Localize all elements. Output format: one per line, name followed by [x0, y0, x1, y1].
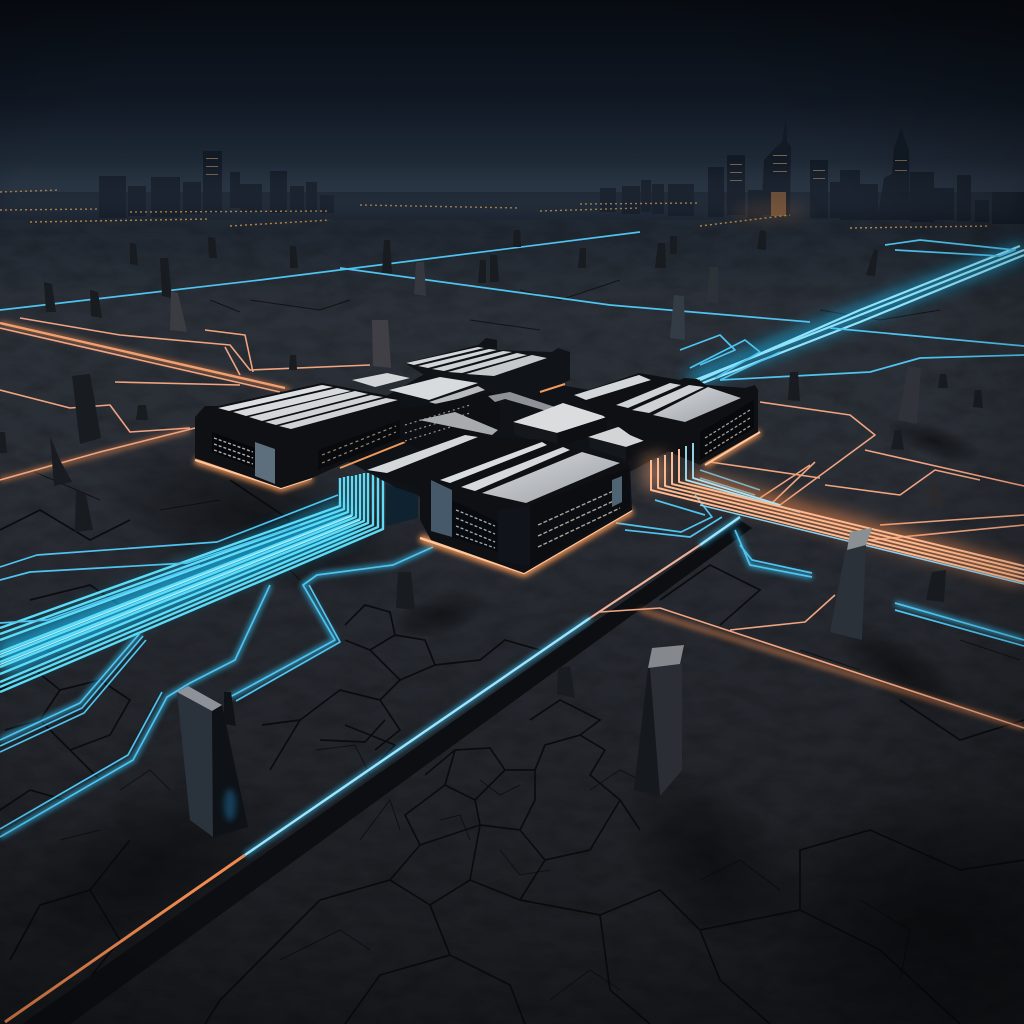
top right cyan bundle — [690, 246, 1024, 386]
pillar shadows on ground — [0, 408, 1024, 1024]
pillars — [0, 230, 983, 837]
dark block beside the blue riser — [386, 484, 418, 526]
building: front center — [367, 435, 632, 573]
building: left — [195, 383, 405, 488]
pillar: right — [830, 528, 872, 640]
building: back center — [405, 338, 570, 398]
sky — [0, 0, 1024, 225]
right orange and cyan circuit fan out of the building — [651, 443, 1024, 584]
lit orange base of the foreground road line — [5, 855, 245, 1022]
main cyan bundle — [0, 472, 383, 692]
pale pink mid section of the road line — [590, 545, 700, 618]
raised road curb along foreground line — [22, 520, 752, 1024]
cracks in the ground — [0, 480, 1024, 1024]
blue circuit lines — [0, 232, 1024, 855]
connector platform — [310, 365, 690, 530]
orange glow beneath buildings — [195, 432, 760, 573]
ground mottling texture — [0, 215, 1024, 1024]
city skyline — [0, 116, 1024, 228]
data center building cluster — [195, 338, 758, 573]
ground — [0, 212, 1024, 1024]
building: mid connector blocks — [352, 373, 655, 460]
orange circuit lines — [0, 318, 1024, 1022]
pillar: near center — [634, 645, 684, 796]
pillar: near left — [177, 686, 248, 837]
building: right — [574, 373, 758, 465]
small pillars — [0, 230, 983, 726]
